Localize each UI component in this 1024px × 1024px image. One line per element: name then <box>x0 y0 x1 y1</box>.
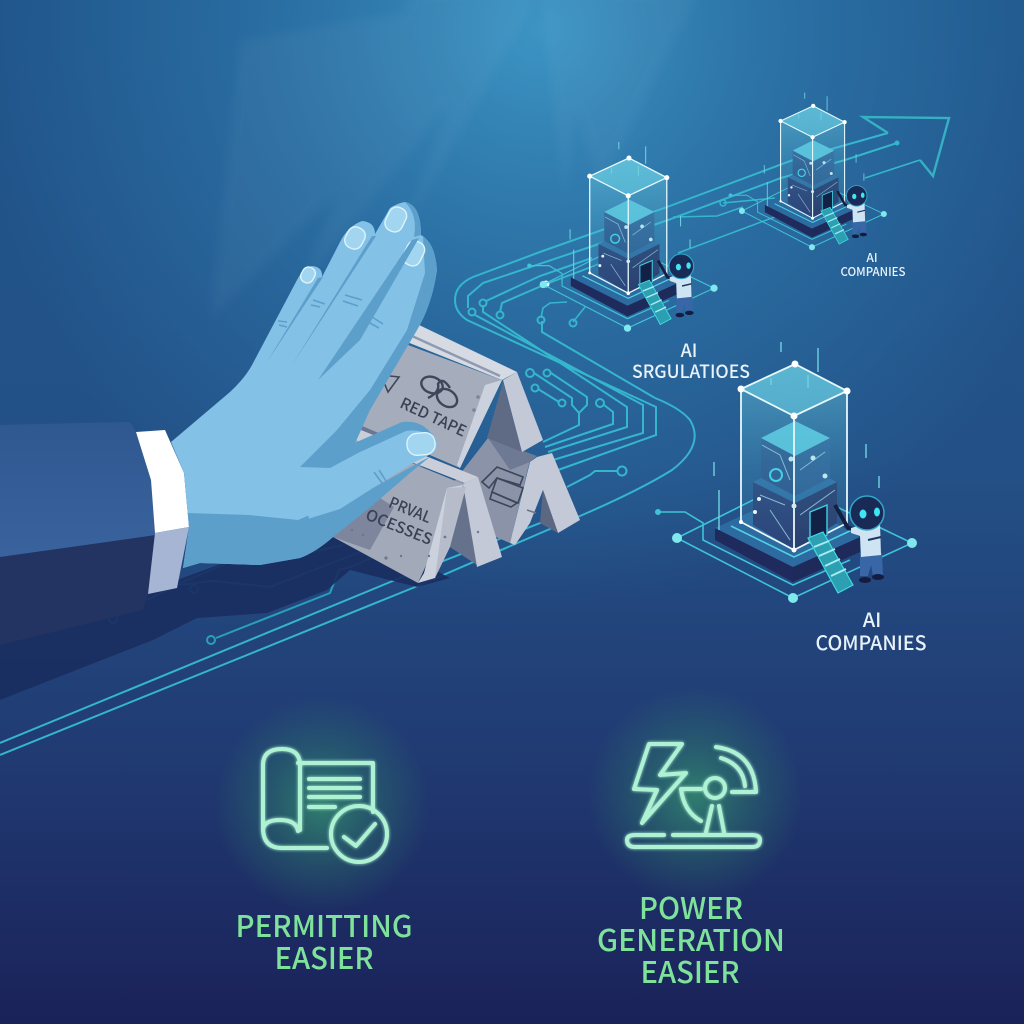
icon: folders <box>482 467 523 507</box>
label: AI companies large <box>816 604 926 656</box>
circuit traces <box>0 133 920 755</box>
tower: top right <box>729 93 887 250</box>
brick: lower left, approval processes: PRVAL <box>386 491 435 528</box>
middle fingertip shadow <box>405 202 421 237</box>
label: AI companies large: COMPANIES <box>816 627 926 656</box>
icon: permit scroll with checkmark <box>263 749 387 862</box>
thumb lower shadow <box>298 456 431 537</box>
brick shadow filler <box>350 410 430 480</box>
thumb <box>300 426 437 525</box>
tower: large <box>655 342 917 603</box>
icon: chain <box>419 374 461 411</box>
label: power generation easier: POWER <box>639 884 743 928</box>
label: AI regulations: AI <box>681 337 697 363</box>
label: permitting easier: EASIER <box>274 934 374 978</box>
label: power generation easier <box>597 884 785 992</box>
arrow <box>863 117 949 176</box>
brick: lower left, approval processes: OCESSES <box>363 503 436 550</box>
label: permitting easier: PERMITTING <box>236 902 412 946</box>
brick: lower left, approval processes <box>333 428 502 583</box>
finger gaps <box>267 236 419 380</box>
bricks: red tape and approval processes <box>333 324 580 583</box>
shirt cuff <box>136 430 189 594</box>
label: AI companies small: COMPANIES <box>840 263 906 280</box>
hand <box>171 202 437 568</box>
glow behind power icon <box>587 687 803 903</box>
fingernails <box>299 204 436 456</box>
brick: top, red tape <box>360 324 543 468</box>
label: power generation easier: GENERATION <box>597 916 785 960</box>
index side shadow <box>300 237 437 467</box>
tower: middle <box>527 142 718 332</box>
label: power generation easier: EASIER <box>640 948 740 992</box>
label: AI companies small <box>840 249 906 280</box>
icon: lightning and wind turbine <box>627 744 760 847</box>
label: AI regulations <box>632 337 750 384</box>
label: AI companies small: AI <box>866 249 878 266</box>
brick: top, red tape: RED TAPE <box>397 392 470 442</box>
label: AI regulations: SRGULATIOES <box>632 358 750 384</box>
hand shadow <box>0 520 450 700</box>
brick: lower right <box>440 438 580 545</box>
sleeve <box>0 422 156 645</box>
palm shadow <box>183 500 345 568</box>
label: permitting easier <box>236 902 412 978</box>
label: AI companies large: AI <box>863 604 881 633</box>
glow behind permit icon <box>214 697 430 913</box>
